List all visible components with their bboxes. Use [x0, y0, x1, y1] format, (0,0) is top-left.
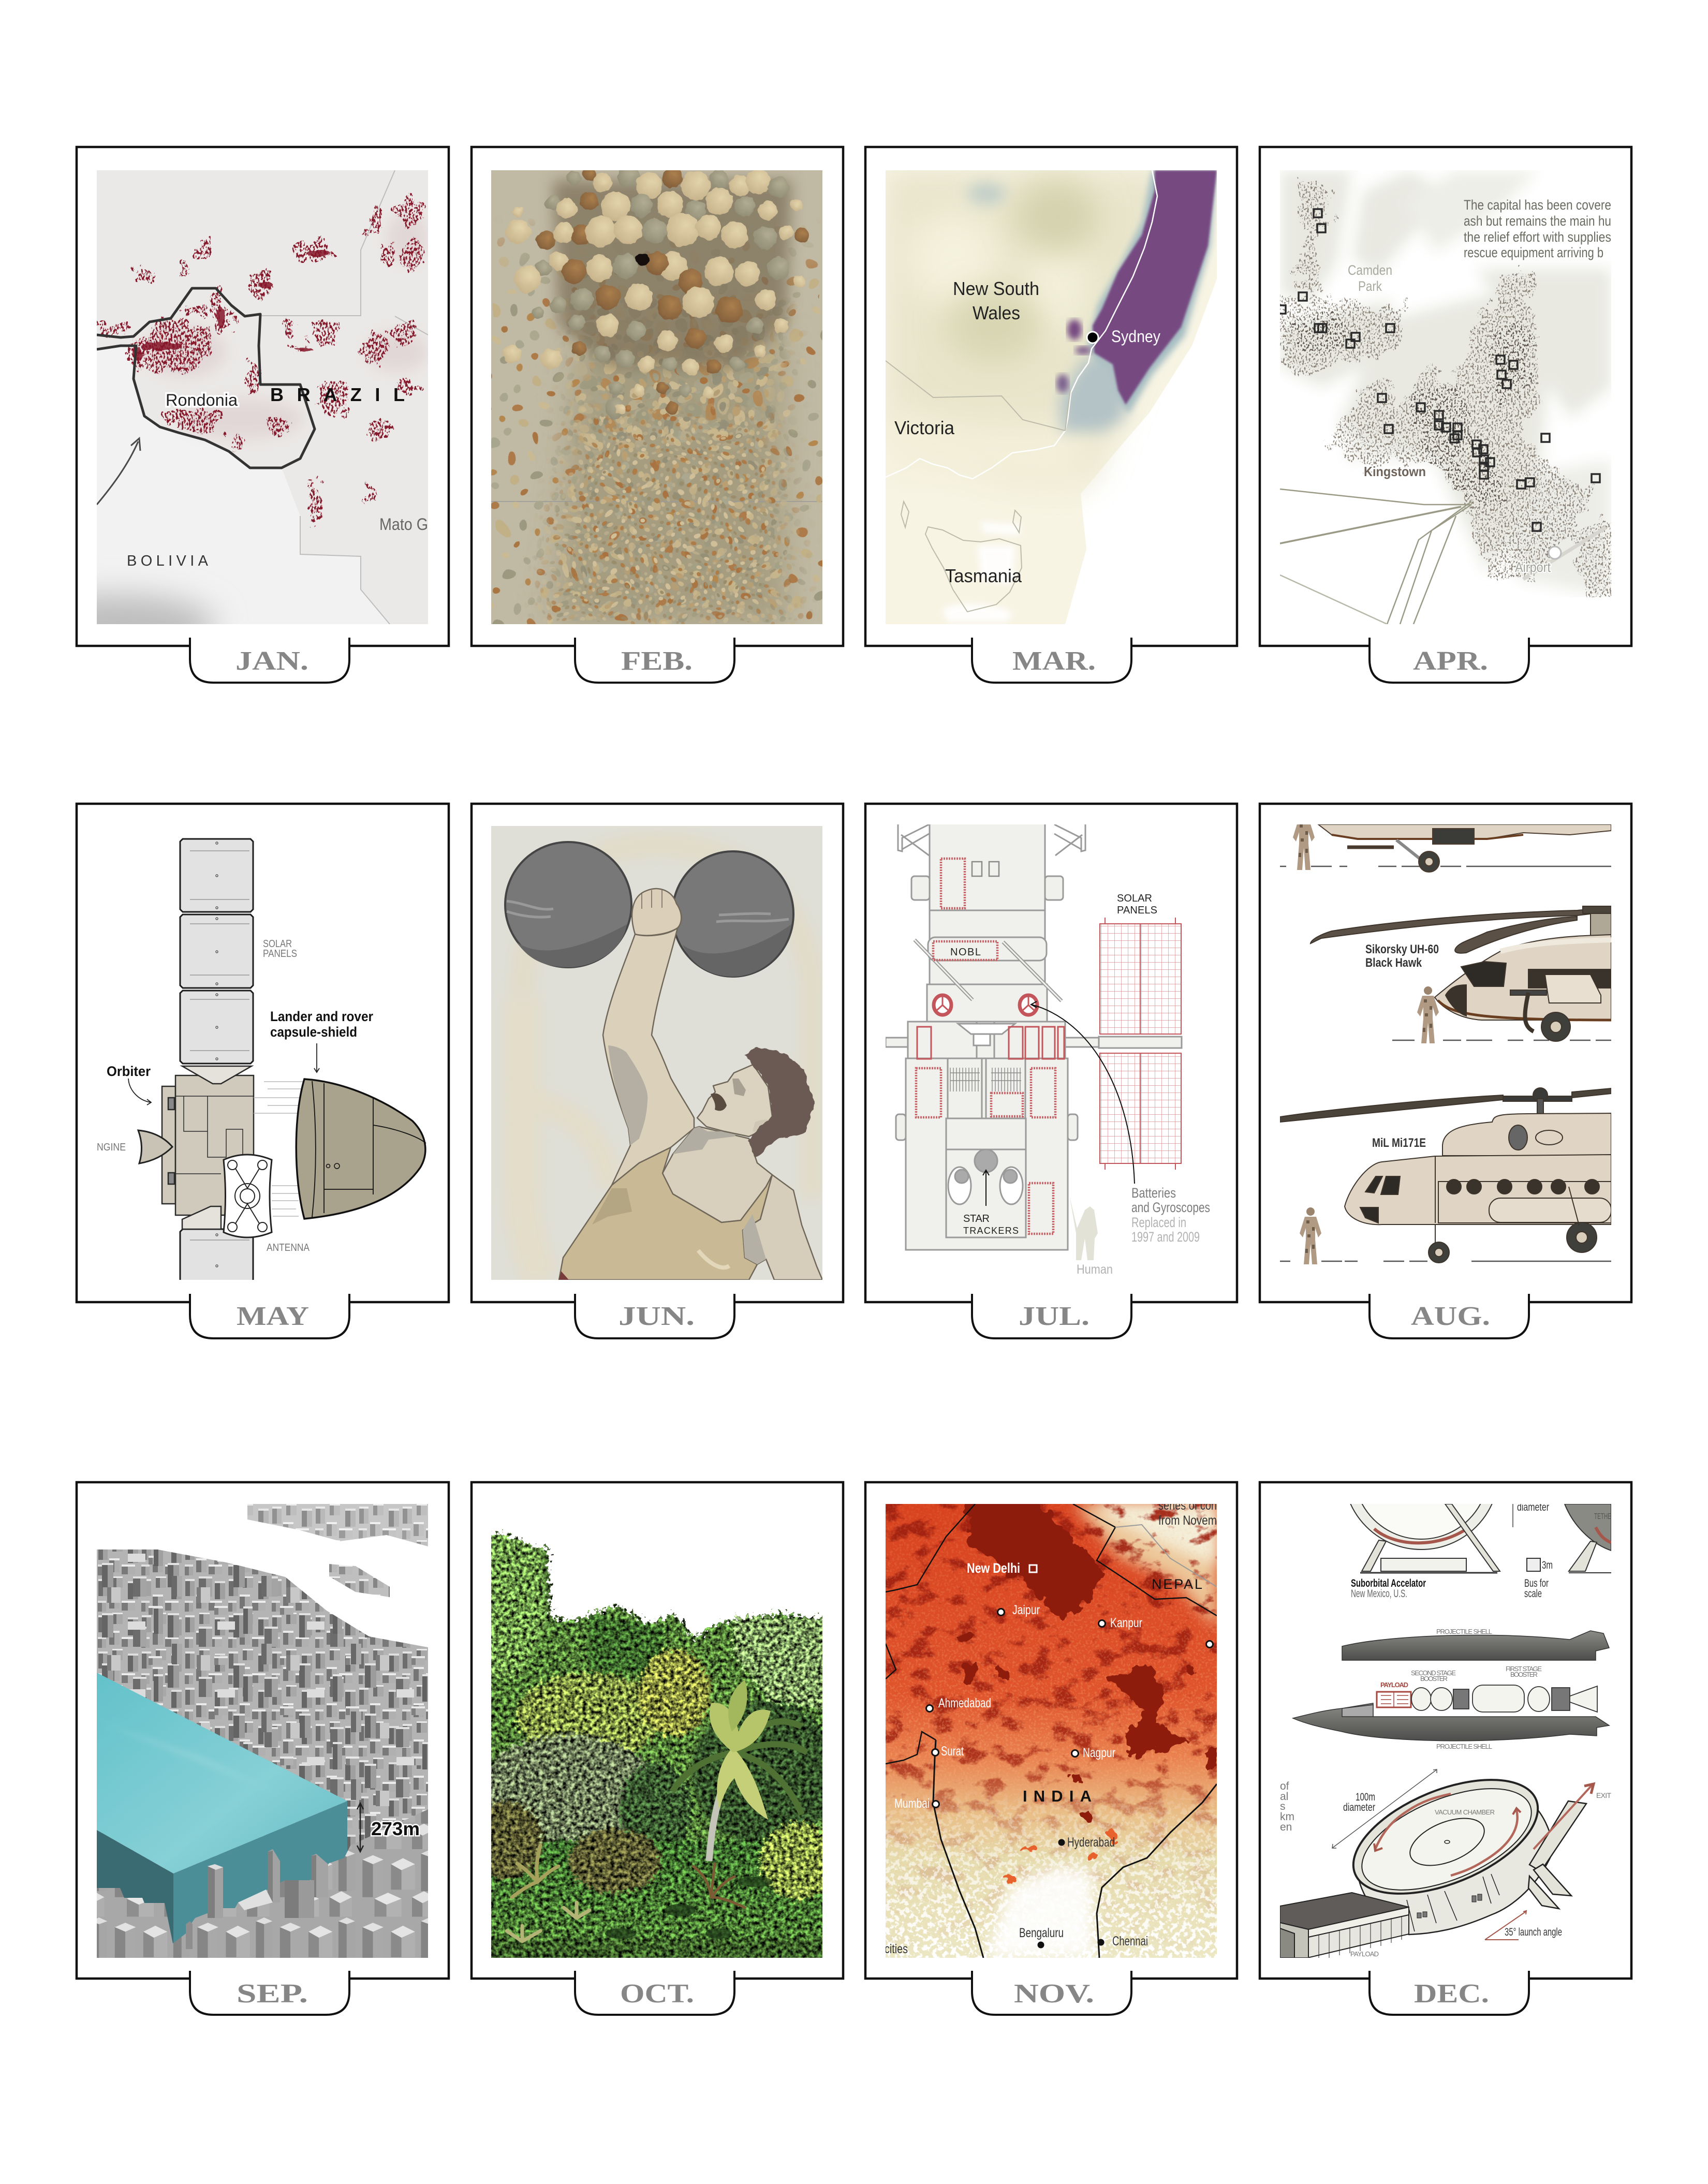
- map labels: Tasmania: [945, 565, 1022, 586]
- month tab: JUN.: JUN.: [619, 1302, 695, 1331]
- panel: September: [77, 1482, 449, 2015]
- map labels: Sydney: [1111, 327, 1160, 346]
- month tab: SEP.: [190, 1971, 349, 2015]
- dense pollution patches: [956, 1494, 1217, 1821]
- card frame: [1260, 804, 1631, 1302]
- labels: PANELS: [263, 948, 297, 960]
- helicopter 2: Black Hawk: [1311, 906, 1611, 1041]
- labels: Lander and rover: [270, 1009, 373, 1024]
- background halo: [522, 844, 812, 1199]
- lower labels: PAYLOAD: [1350, 1950, 1379, 1958]
- ground lines: [1280, 866, 1611, 1261]
- stage labels: [1380, 1628, 1542, 1750]
- diagram: suborbital accelerator: [1280, 1394, 1611, 1958]
- building texture: [1270, 175, 1622, 600]
- palm tree: [672, 1680, 807, 1861]
- understory plants: [507, 1846, 745, 1941]
- month tab: NOV.: [972, 1971, 1131, 2015]
- ferry routes: [1280, 489, 1471, 624]
- soldier 2: [1417, 986, 1439, 1043]
- main city: [97, 1550, 428, 1958]
- map labels: [1348, 262, 1551, 575]
- month tab: MAR.: MAR.: [1012, 646, 1096, 676]
- month tab: JAN.: JAN.: [235, 646, 308, 676]
- panel: May: [77, 804, 449, 1338]
- card frame: [865, 804, 1237, 1302]
- labels: ANTENNA: [267, 1242, 310, 1253]
- panel: July: [865, 804, 1237, 1338]
- map labels: Park: [1358, 278, 1382, 294]
- map labels: BRAZIL: [270, 384, 405, 405]
- month tab: JUL.: JUL.: [1019, 1302, 1089, 1331]
- month tab: FEB.: [575, 638, 734, 683]
- small hatches: [972, 862, 999, 876]
- illustration: strongman lifting dumbbell: [491, 826, 822, 1280]
- arrow to Rondonia: [97, 438, 140, 505]
- month tab: MAY: [190, 1294, 349, 1338]
- human silhouette: [1069, 1195, 1098, 1260]
- map labels: Airport: [1515, 559, 1551, 575]
- lander capsule: [296, 1079, 426, 1219]
- purple smoke plume: [1093, 170, 1217, 405]
- labels: Orbiter: [107, 1064, 151, 1079]
- helicopter 3: Mil Mi171E: [1280, 1088, 1611, 1263]
- map: Rondonia deforestation: [97, 170, 428, 624]
- labels: SOLAR: [1117, 893, 1152, 904]
- map: New South Wales smoke: [886, 170, 1217, 624]
- labels: [950, 893, 1210, 1277]
- runway and airport: [1523, 527, 1606, 579]
- card frame: [865, 1482, 1237, 1979]
- map labels: BOLIVIA: [127, 553, 209, 569]
- soldier 3: [1300, 1207, 1321, 1264]
- accelerator disc: [1337, 1757, 1586, 1935]
- panel: February: [472, 147, 843, 683]
- panel: March: [865, 147, 1237, 683]
- launch angle marker: [1485, 1911, 1526, 1940]
- labels: capsule-shield: [270, 1024, 357, 1040]
- illustration: water volume over city: [97, 1504, 428, 1958]
- map labels: New Delhi: [967, 1560, 1020, 1576]
- labels: [97, 938, 373, 1253]
- month tab: JAN.: [190, 638, 349, 683]
- Rondonia boundary: [97, 288, 315, 468]
- diagram: orbiter and lander capsule: [97, 838, 426, 1280]
- month tab: MAY: MAY: [237, 1302, 309, 1331]
- map labels: Nagpur: [1083, 1746, 1115, 1760]
- month tab: AUG.: [1370, 1294, 1529, 1338]
- panel: December: [1260, 1394, 1631, 2015]
- panel: August: [1260, 804, 1631, 1338]
- map labels: Surat: [941, 1744, 964, 1759]
- hair: [745, 1047, 814, 1158]
- month tab: JUN.: [575, 1294, 734, 1338]
- map labels: Rondonia: [166, 391, 238, 409]
- card frame: [77, 804, 449, 1302]
- top labels: Bus for: [1524, 1577, 1549, 1589]
- tank top: [559, 1147, 772, 1280]
- panel: January: [19, 147, 449, 683]
- lower labels: EXIT: [1596, 1791, 1611, 1799]
- diagram: helicopters to scale: [1280, 821, 1611, 1280]
- engine: [138, 1130, 172, 1163]
- lower labels: VACUUM CHAMBER: [1435, 1808, 1495, 1816]
- faint clearing haze: [143, 212, 428, 439]
- map labels: Kanpur: [1110, 1616, 1142, 1630]
- height callout: 273m: [371, 1818, 420, 1839]
- map labels: Victoria: [894, 417, 955, 438]
- antenna dish: [224, 1155, 272, 1237]
- lower labels: en: [1280, 1821, 1292, 1833]
- orbiter body: [162, 1066, 254, 1229]
- month tab: JUL.: [972, 1294, 1131, 1338]
- labels: SOLAR: [263, 938, 292, 950]
- map labels: Mumbai: [894, 1796, 930, 1811]
- map labels: [894, 278, 1160, 586]
- accelerator wheel: [1344, 1394, 1611, 1573]
- top labels: Suborbital Accelator: [1351, 1577, 1426, 1589]
- lower labels: [1280, 1780, 1611, 1958]
- labels: NOBL: [950, 947, 981, 958]
- month tab: APR.: APR.: [1413, 646, 1488, 676]
- launch exit arrow: [1534, 1784, 1593, 1849]
- map: Kingstown ash damage: [1280, 170, 1611, 624]
- solar panels grid: [1100, 918, 1181, 1170]
- helicopter 1 partial: [1318, 824, 1611, 872]
- solar panels: [180, 839, 253, 1284]
- lower labels: diameter: [1343, 1802, 1375, 1813]
- month tab: FEB.: FEB.: [621, 646, 693, 676]
- labels: Black Hawk: [1365, 956, 1422, 970]
- map labels: Hyderabad: [1067, 1835, 1115, 1850]
- foreground towers: [186, 1849, 328, 1949]
- map labels: NEPAL: [1152, 1576, 1202, 1592]
- stage labels: PAYLOAD: [1380, 1681, 1408, 1689]
- damage markers: [1277, 209, 1600, 531]
- labels: MiL Mi171E: [1372, 1136, 1426, 1150]
- lower labels: 100m: [1356, 1791, 1375, 1803]
- panel: November: [865, 1482, 1237, 2015]
- batteries and panels in red: [916, 859, 1055, 1234]
- speed lines: [254, 1082, 304, 1216]
- month tab: AUG.: AUG.: [1411, 1302, 1490, 1331]
- card frame: [77, 147, 449, 646]
- labels: TRACKERS: [963, 1226, 1019, 1236]
- white gaps around Tasmania: [943, 522, 1021, 622]
- city markers: [926, 1565, 1213, 1948]
- map labels: Wales: [973, 302, 1020, 323]
- top labels: [1351, 1501, 1611, 1600]
- map labels: Ahmedabad: [938, 1696, 991, 1710]
- card frame: [472, 1482, 843, 1979]
- panel: April: [1260, 147, 1631, 683]
- panel: October: [470, 1482, 843, 2015]
- soldier 1: [1293, 821, 1315, 870]
- card frame: [1260, 147, 1631, 646]
- gyroscopes: [934, 995, 1037, 1015]
- month tab: DEC.: DEC.: [1414, 1979, 1489, 2009]
- map labels: [885, 1498, 1217, 1956]
- foreground city: [97, 1809, 428, 1958]
- dumbbell: [505, 842, 793, 977]
- pointer arrows: [983, 1001, 1135, 1206]
- labels: NGINE: [97, 1142, 126, 1153]
- map labels: [127, 384, 428, 569]
- map labels: Chennai: [1112, 1934, 1148, 1949]
- internal stages: [1377, 1685, 1597, 1712]
- card frame: [77, 1482, 449, 1979]
- map labels: Bengaluru: [1019, 1926, 1064, 1940]
- ear: [753, 1119, 772, 1132]
- far arm shadowed: [612, 1145, 646, 1185]
- lower labels: km: [1280, 1811, 1294, 1823]
- map labels: Kingstown: [1364, 464, 1426, 479]
- face: [697, 1065, 772, 1137]
- labels: Sikorsky UH-60: [1365, 942, 1439, 956]
- card frame: [472, 147, 843, 646]
- lower labels: 35° launch angle: [1505, 1926, 1562, 1938]
- distant city blocks: [247, 1504, 428, 1546]
- card frame: [1260, 1482, 1631, 1979]
- far arm: [743, 1175, 822, 1280]
- month tab: OCT.: OCT.: [620, 1979, 694, 2009]
- labels: STAR: [963, 1213, 990, 1224]
- borders and coastlines: [886, 1504, 1217, 1958]
- height callout: [357, 1803, 420, 1852]
- shorts: [559, 1271, 569, 1280]
- diameter arrow: [1332, 1769, 1437, 1848]
- vents: [950, 1068, 1021, 1091]
- month tab: DEC.: [1370, 1971, 1529, 2015]
- map: India pollution: [885, 1498, 1217, 1958]
- top labels: scale: [1524, 1588, 1542, 1600]
- caption text: [1464, 197, 1611, 260]
- map labels: INDIA: [1023, 1787, 1092, 1805]
- projectile: [1293, 1631, 1609, 1741]
- lower labels: of: [1280, 1780, 1289, 1792]
- illustration: falling rocks: [491, 170, 822, 624]
- card frame: [865, 147, 1237, 646]
- labels: Replaced in: [1131, 1215, 1186, 1230]
- panel: June: [472, 804, 843, 1338]
- stage labels: FIRST STAGE: [1506, 1665, 1542, 1673]
- pointer arrows: [128, 1043, 319, 1105]
- stage labels: PROJECTILE SHELL: [1436, 1743, 1492, 1750]
- labels: Human: [1077, 1262, 1113, 1277]
- labels: Batteries: [1131, 1185, 1176, 1201]
- map labels: New South: [953, 278, 1039, 299]
- month tab: APR.: [1370, 638, 1529, 683]
- coastlines: [886, 170, 1157, 612]
- lifter figure: [559, 889, 822, 1280]
- labels: PANELS: [1117, 905, 1157, 916]
- launch building: [1280, 1893, 1409, 1958]
- water block: [97, 1673, 347, 1949]
- Sydney marker: [1087, 332, 1098, 343]
- stage labels: BOOSTER: [1510, 1671, 1538, 1678]
- top labels: 3m: [1542, 1559, 1553, 1571]
- top labels: diameter: [1517, 1501, 1549, 1513]
- illustration: rainforest: [470, 1504, 838, 1965]
- card frame: [472, 804, 843, 1302]
- Himalaya light band: [1073, 1504, 1217, 1628]
- top labels: New Mexico, U.S.: [1351, 1588, 1407, 1600]
- stage labels: SECOND STAGE: [1411, 1669, 1456, 1677]
- lower labels: s: [1280, 1801, 1286, 1812]
- month tab: MAR.: [972, 638, 1131, 683]
- lower labels: al: [1280, 1791, 1288, 1803]
- map labels: Camden: [1348, 262, 1392, 278]
- red clearing patches: [98, 193, 422, 527]
- map labels: cities: [885, 1942, 908, 1956]
- map labels: Jaipur: [1012, 1603, 1040, 1617]
- month tab: OCT.: [575, 1971, 734, 2015]
- diagram: space telescope: [886, 824, 1210, 1277]
- large rocks: [503, 165, 809, 419]
- labels: [1365, 942, 1439, 1150]
- month tab: SEP.: SEP.: [237, 1979, 308, 2009]
- stage labels: PROJECTILE SHELL: [1436, 1628, 1492, 1635]
- month tab: NOV.: NOV.: [1014, 1979, 1094, 2009]
- stage labels: BOOSTER: [1420, 1675, 1448, 1683]
- chest and neck skin: [662, 1127, 772, 1222]
